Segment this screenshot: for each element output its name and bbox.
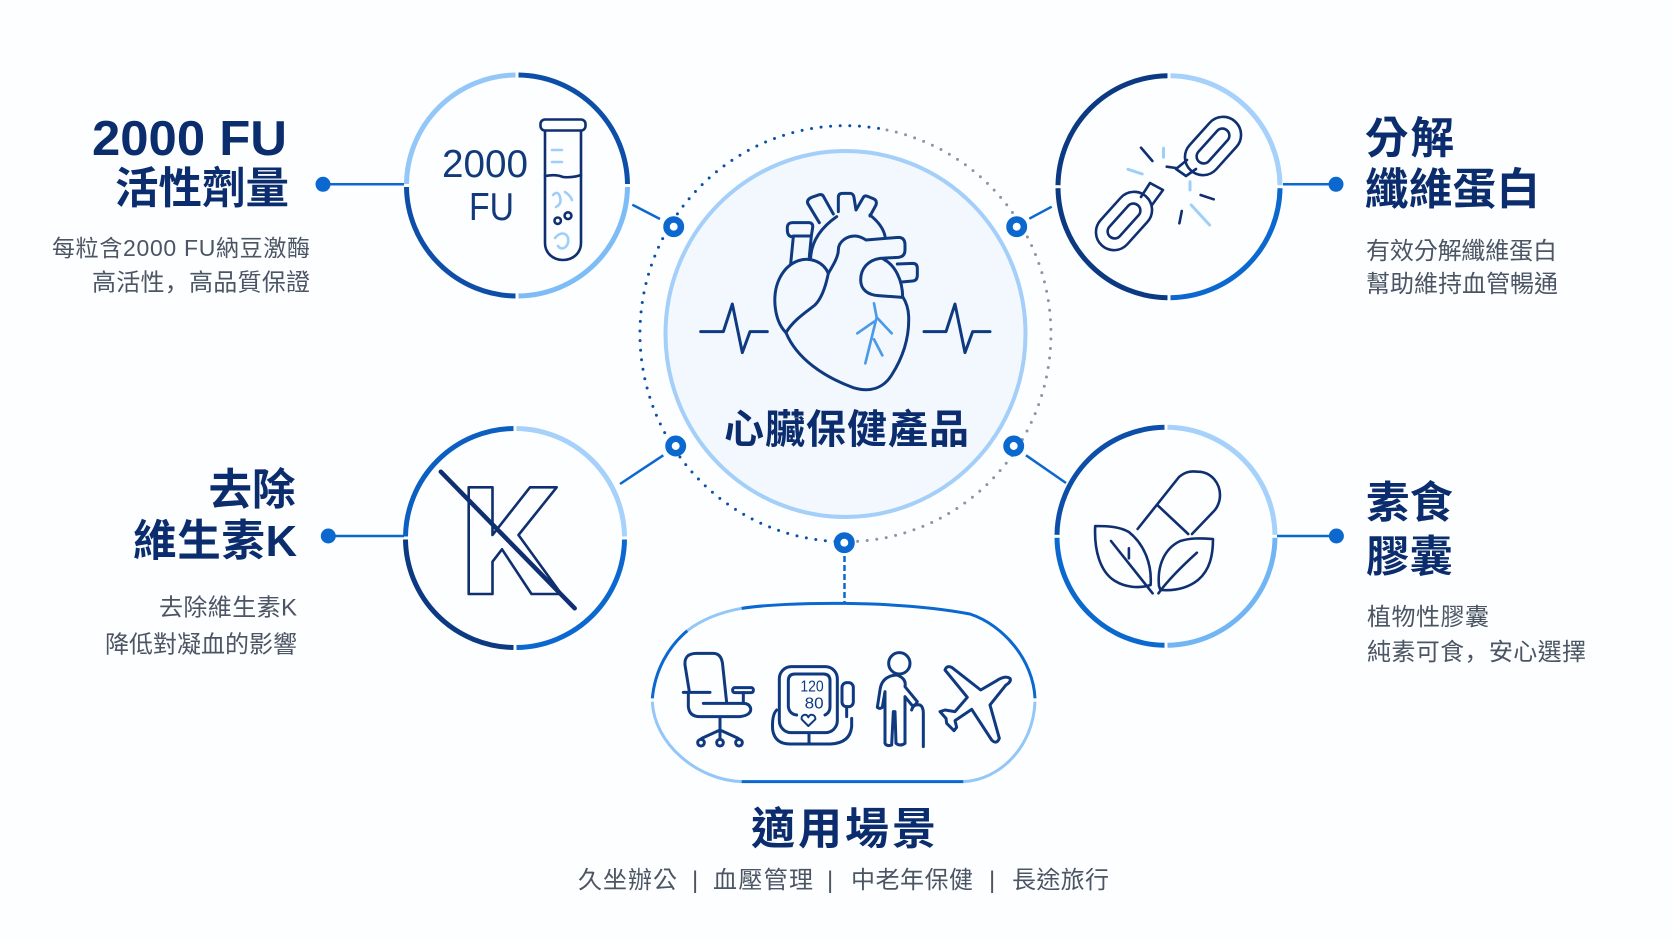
icon: anatomical heart with ECG traces xyxy=(701,193,990,390)
leader line and dot xyxy=(321,528,404,544)
icon: crossed-out K xyxy=(441,472,575,608)
description: 去除維生素K xyxy=(159,594,297,622)
panel: 去除維生素K: 維生素K xyxy=(133,518,298,566)
icon: blood pressure monitor xyxy=(772,667,853,744)
description: 降低對凝血的影響 xyxy=(105,632,297,658)
icon: capsule and leaves xyxy=(1095,471,1220,593)
icon: office chair xyxy=(683,653,753,746)
icon: elderly person with cane xyxy=(877,653,923,747)
scenario list: 長途旅行 xyxy=(1012,867,1109,894)
panel: 分解纖維蛋白: 纖維蛋白 xyxy=(1365,166,1540,214)
icon label: 2000 FU xyxy=(442,143,528,229)
description xyxy=(105,594,297,658)
scenario list: 血壓管理 xyxy=(713,867,813,894)
scenario list: | xyxy=(989,867,995,894)
monitor reading xyxy=(800,679,824,712)
description xyxy=(1366,238,1558,298)
monitor reading: 120 xyxy=(800,679,824,696)
panel: 素食膠囊 xyxy=(1057,427,1586,666)
description xyxy=(1367,604,1586,666)
scenario list: | xyxy=(692,867,698,894)
icon: broken chain xyxy=(1089,109,1248,258)
panel: 素食膠囊: 膠囊 xyxy=(1366,534,1453,582)
panel: centre heart xyxy=(666,151,1026,517)
connector nodes xyxy=(666,220,1024,550)
icon label: 2000 FU: 2000 xyxy=(442,143,528,186)
leader line and dot xyxy=(1283,177,1344,192)
pill outline and icons xyxy=(652,603,1035,782)
leader line and dot xyxy=(1277,528,1344,544)
panel: 2000 FU xyxy=(52,75,628,296)
pill outline xyxy=(652,603,1035,782)
panel: 分解纖維蛋白 xyxy=(1058,76,1558,298)
centre title: 心臟保健產品 xyxy=(724,408,969,452)
scenario list: 久坐辦公 xyxy=(578,867,677,894)
dotted orbit ring xyxy=(640,126,1051,542)
icon: test tube xyxy=(540,120,586,260)
heading: 2000 FU xyxy=(92,112,287,166)
heading: 去除 xyxy=(208,467,296,515)
ring xyxy=(406,75,628,296)
panel: 去除維生素K xyxy=(105,428,624,658)
centre disc xyxy=(666,151,1026,517)
description: 植物性膠囊 xyxy=(1367,604,1489,631)
panel: usage scenarios xyxy=(578,603,1109,894)
panel: 2000 FU: 活性劑量 xyxy=(115,166,289,214)
description xyxy=(52,235,310,296)
icon label: 2000 FU: FU xyxy=(469,186,514,229)
scenario list: | xyxy=(827,867,833,894)
description: 有效分解纖維蛋白 xyxy=(1366,238,1557,265)
ring xyxy=(1058,76,1280,298)
icon: airplane xyxy=(940,667,1010,742)
connector lines between centre and feature circles xyxy=(620,205,1066,604)
monitor reading: 80 xyxy=(805,695,824,712)
scenario list xyxy=(578,867,1109,894)
leader line and dot xyxy=(316,177,404,192)
scenario list: 中老年保健 xyxy=(851,867,973,894)
heading: 分解 xyxy=(1365,116,1454,164)
description: 每粒含2000 FU納豆激酶 xyxy=(52,235,310,261)
description: 高活性，高品質保證 xyxy=(92,270,310,296)
description: 幫助維持血管暢通 xyxy=(1366,271,1558,298)
heading: 適用場景 xyxy=(751,805,936,854)
ring xyxy=(406,428,624,648)
heading: 素食 xyxy=(1366,480,1453,528)
description: 純素可食，安心選擇 xyxy=(1367,639,1586,666)
ring xyxy=(1057,427,1275,645)
